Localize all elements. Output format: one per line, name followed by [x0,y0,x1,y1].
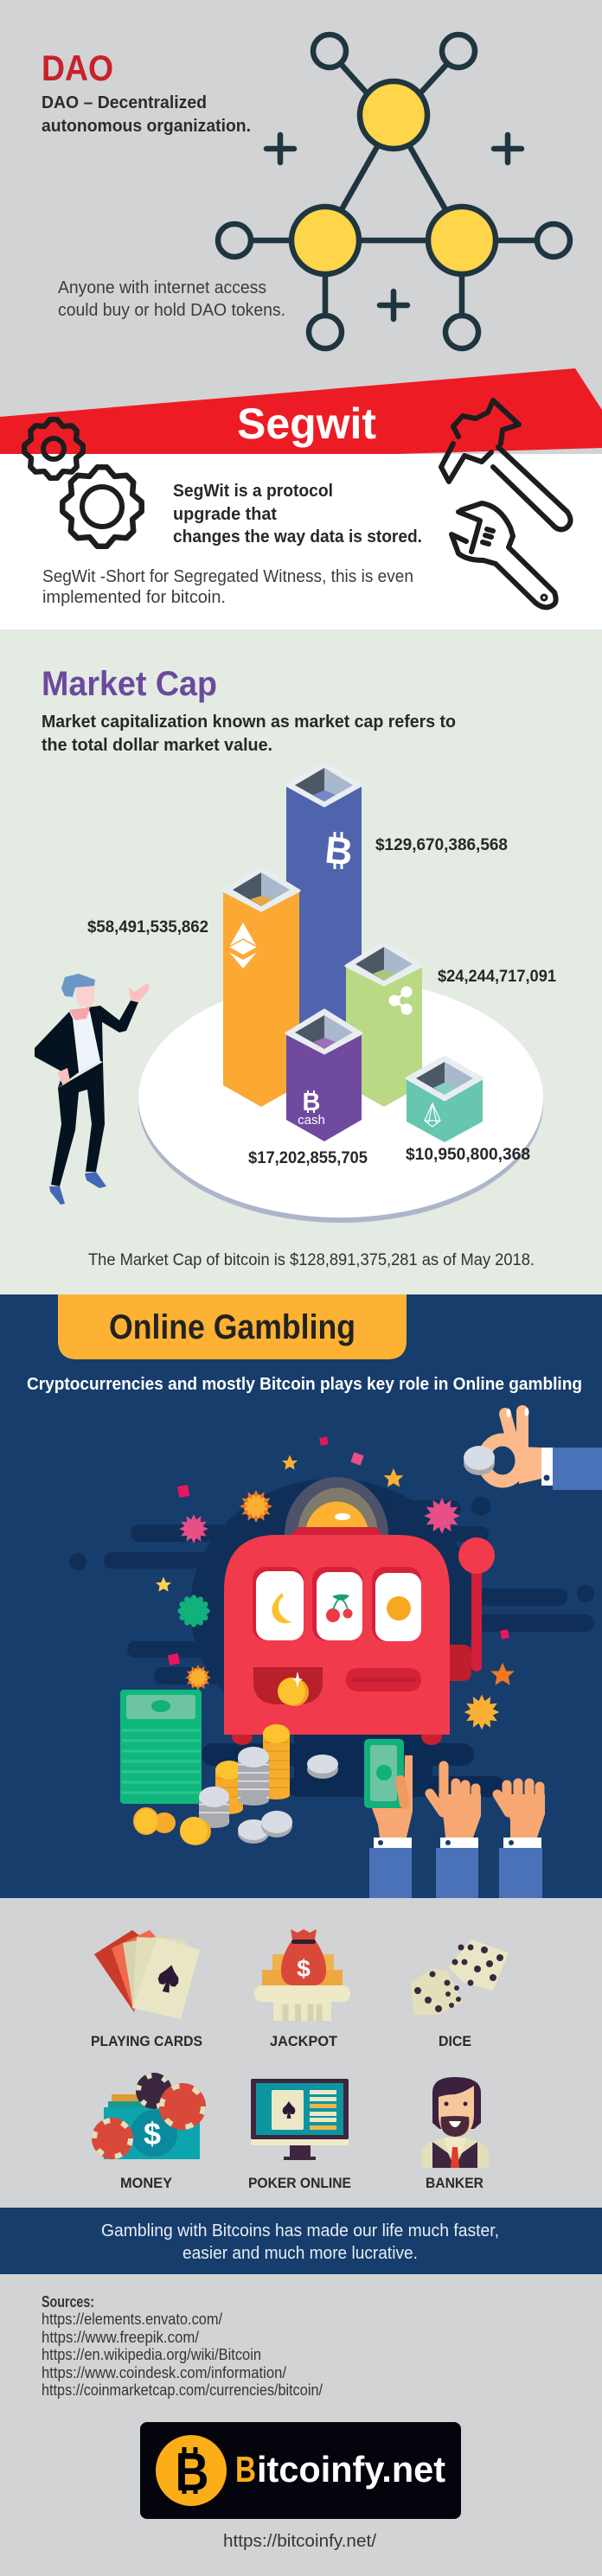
labels: market cap values: $17,202,855,705 [248,1149,368,1167]
banner: red ribbon [0,368,602,454]
icon: jackpot [254,1929,350,2021]
text: sources list: https://coinmarketcap.com/currencies/bitcoin/ [42,2381,323,2399]
banner: gambling conclusion [0,2208,602,2274]
panel: sources and footer [0,2274,602,2576]
text: SegWit definition: changes the way data is stored. [173,527,422,547]
bar: Ethereum [223,867,299,1107]
text: SegWit definition: upgrade that [173,505,277,524]
labels: market cap values: $58,491,535,862 [87,918,208,936]
text: SegWit definition: SegWit is a protocol [173,482,333,501]
illustration: presenter man [35,974,150,1205]
icon: banker [421,2077,489,2168]
text: sources list: https://www.freepik.com/ [42,2329,199,2346]
bar: Bitcoin: B [323,828,355,874]
icon: dice [410,1940,509,2015]
text: bitcoin market cap note: The Market Cap of bitcoin is $128,891,375,281 as of May 2018. [88,1251,535,1269]
icon: money and chips: $ [144,2116,161,2151]
panel: gambling icons [0,1898,602,2208]
label: poker online: POKER ONLINE [248,2176,351,2191]
icon: jackpot: $ [297,1955,311,1982]
label: banker: BANKER [426,2176,484,2191]
text: DAO access note: Anyone with internet access [58,278,266,297]
panel: Market Cap [0,630,602,1295]
icon: poker online monitor [251,2079,349,2160]
text: Market Cap definition [42,713,456,755]
heading: DAO: DAO [42,48,113,88]
icon: gears [24,419,142,547]
text: sources list: https://en.wikipedia.org/wiki/Bitcoin [42,2346,261,2363]
text: DAO definition [42,93,251,136]
labels: market cap values: $10,950,800,368 [406,1146,530,1164]
text: SegWit note [42,567,413,607]
labels: market cap values: $129,670,386,568 [375,836,508,854]
label: playing cards: PLAYING CARDS [91,2034,202,2049]
label: jackpot: JACKPOT [270,2034,337,2049]
logo: Bitcoinfy.net: B [235,2449,256,2490]
text: gambling intro: Cryptocurrencies and mostly Bitcoin plays key role in Online gambling [27,1375,582,1394]
icon: wrench [452,503,556,607]
bar: Ripple [346,942,422,1107]
text: sources list: https://elements.envato.com/ [42,2311,222,2328]
bar: EOS [407,1057,483,1142]
illustration: raised hands [364,1739,545,1898]
label: dice: DICE [439,2034,471,2049]
text: sources list: Sources: [42,2293,94,2311]
bar: Bitcoin [286,763,362,1072]
bar: Bitcoin Cash: B [303,1089,320,1116]
text: DAO access note: could buy or hold DAO tokens. [58,301,285,320]
text: website url: https://bitcoinfy.net/ [223,2532,376,2551]
chart: isometric market cap bars [87,763,556,1223]
illustration: hand holding coin [464,1408,602,1490]
heading: Segwit: Segwit [237,400,376,448]
bar: Bitcoin Cash: cash [298,1113,325,1128]
text: DAO definition: autonomous organization. [42,117,251,136]
banner: gambling conclusion: Gambling with Bitcoins has made our life much faster, [101,2221,499,2240]
logo: Bitcoinfy.net [140,2422,461,2519]
illustration: stack of bills [120,1690,202,1804]
illustration: coin stacks [134,1724,338,1845]
text: DAO definition: DAO – Decentralized [42,93,207,112]
text: SegWit definition [173,482,422,547]
text: sources list [42,2293,323,2399]
icon: hammer [441,400,571,529]
platform ellipse [138,979,543,1223]
illustration: slot machine [224,1477,495,1745]
background: dark cloud shapes [69,1479,594,1797]
label: money: MONEY [120,2176,172,2191]
logo: Bitcoinfy.net: itcoinfy.net [257,2449,445,2490]
banner: Online Gambling heading [58,1294,407,1359]
text: DAO access note [58,278,285,320]
banner: Online Gambling heading: Online Gambling [109,1308,355,1346]
icon: playing cards [94,1930,200,2019]
text: SegWit note: SegWit -Short for Segregated Witness, this is even [42,567,413,586]
labels: market cap values: $24,244,717,091 [438,968,556,986]
text: Market Cap definition: the total dollar market value. [42,736,272,755]
reels [253,1567,421,1641]
text: sources list: https://www.coindesk.com/information/ [42,2364,286,2381]
banner: gambling conclusion: easier and much more lucrative. [183,2244,418,2263]
text: Market Cap definition: Market capitalization known as market cap refers to [42,713,456,732]
decoration: stars and confetti [156,1436,515,1725]
panel: Online Gambling [0,1294,602,1898]
panel: Segwit [0,368,602,630]
text: SegWit note: implemented for bitcoin. [42,588,226,607]
heading: Market Cap: Market Cap [42,665,217,703]
panel: DAO [0,0,602,455]
icon: money and chips [92,2073,206,2159]
bar: Bitcoin Cash [286,1010,362,1141]
labels: market cap values [87,836,556,1167]
coin tray [253,1667,323,1706]
icon: decentralized network diagram [218,35,570,348]
logo: Bitcoinfy.net: B [175,2443,209,2502]
